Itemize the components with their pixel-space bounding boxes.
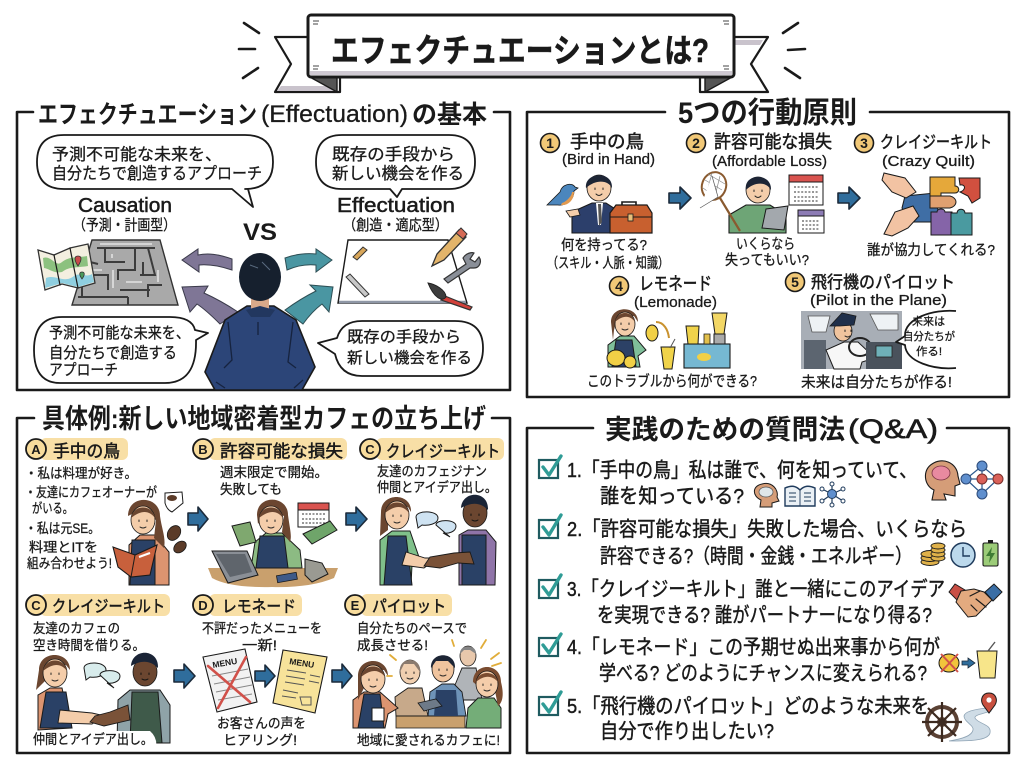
step A: Bird in Hand: A: [31, 442, 41, 457]
step D: Lemonade: 一新!: [242, 638, 277, 653]
principle 3: Crazy Quilt: 3: [860, 135, 868, 151]
step C: Crazy Quilt top: 友達のカフェジナン: [377, 464, 487, 479]
step A: Bird in Hand: がいる。: [32, 501, 73, 516]
icon: clock: [951, 543, 975, 567]
arrow: A to B: [188, 507, 208, 531]
step C: Crazy Quilt bottom: 空き時間を借りる。: [33, 638, 145, 653]
speech bubble: pilot: 作る!: [916, 345, 942, 358]
icon: check 1: [539, 456, 561, 478]
emphasis marks left: [239, 23, 259, 78]
step D: Lemonade: お客さんの声を: [217, 715, 306, 731]
question 5: 自分で作り出したい?: [600, 720, 774, 743]
principle 2: Affordable Loss: 2: [692, 135, 700, 151]
step A: Bird in Hand: 組み合わせよう!: [27, 556, 112, 571]
illustration: handshake at cafe: [28, 653, 170, 749]
step E: Pilot: 地域に愛されるカフェに!: [357, 733, 500, 748]
principle 5: Pilot in the Plane: 飛行機のパイロット: [811, 273, 955, 292]
icon: maze: [72, 240, 178, 305]
question 3: [539, 575, 1002, 627]
icon: check 4: [539, 634, 561, 656]
speech bubble: bottom left: [34, 317, 208, 383]
illustration: pilot in cockpit: [801, 311, 902, 369]
principle 5: Pilot in the Plane: (Pilot in the Plane): [810, 292, 947, 309]
illustration: woman budgeting at counter: [208, 500, 338, 587]
step A: Bird in Hand: 料理とITを: [29, 540, 98, 555]
icon: businessman with bird and toolbox: [547, 175, 652, 233]
principle 3: Crazy Quilt: クレイジーキルト: [880, 133, 992, 152]
heading: basics: エフェクチュエーション: [38, 101, 257, 129]
step B: Affordable Loss: [193, 438, 347, 587]
question 2: 許容できる?（時間・金銭・エネルギー）: [600, 545, 912, 568]
illustration: tool canvas: [338, 240, 467, 303]
illustration: old menu crossed out: [203, 649, 257, 712]
speech bubble: top left: 自分たちで創造するアプローチ: [52, 164, 262, 183]
step B: Affordable Loss: 週末限定で開始。: [220, 465, 328, 480]
speech bubble: bottom left: 自分たちで創造する: [49, 344, 177, 362]
heading: basics: (Effectuation): [261, 101, 408, 128]
step C: Crazy Quilt bottom: 仲間とアイデア出し。: [33, 731, 153, 747]
icon: person with net and calendars: [698, 169, 824, 233]
step B: Affordable Loss: B: [198, 442, 208, 457]
icon: open book: [785, 486, 815, 506]
label: Causation: Causation: [78, 195, 172, 217]
emphasis marks right: [783, 23, 805, 78]
step B: Affordable Loss: 許容可能な損失: [220, 442, 343, 461]
principle 1: Bird in Hand: (Bird in Hand): [562, 151, 655, 168]
speech bubble: bottom left: アプローチ: [49, 361, 118, 379]
question 5: [539, 692, 996, 743]
illustration: new menu: [273, 650, 327, 713]
principle 4: Lemonade: (Lemonade): [634, 294, 717, 311]
speech bubble: top left: 予測不可能な未来を、: [52, 145, 222, 164]
speech bubble: pilot: 自分たちが: [903, 329, 955, 343]
panel: concrete example: [17, 404, 510, 753]
arrow: to effectuation lower: [285, 285, 333, 324]
step D: Lemonade: [193, 594, 327, 748]
icon: paint brush: [428, 283, 472, 310]
principle 4: Lemonade: 4: [615, 278, 623, 294]
speech bubble: top left: [37, 135, 273, 207]
illustration: new menu: MENU: [289, 656, 315, 670]
principle 4: Lemonade: レモネード: [639, 274, 712, 294]
icon: small head: [754, 483, 779, 507]
icon: woman with lemons and juice stand: [607, 309, 730, 369]
icon: check 3: [539, 575, 561, 598]
icon: lemon crossed: [939, 654, 959, 672]
icon: network star: [820, 482, 845, 507]
step C: Crazy Quilt top: [360, 438, 504, 585]
icon: wrench: [444, 253, 480, 283]
heading: five principles: 5つの行動原則: [678, 97, 857, 130]
heading: concrete example: 具体例:新しい地域密着型カフェの立ち上げ: [42, 404, 486, 434]
step C: Crazy Quilt bottom: [26, 594, 170, 749]
icon: juice glass: [977, 642, 997, 678]
principle 5: Pilot in the Plane: 未来は自分たちが作る!: [801, 374, 952, 391]
principle 4: Lemonade: このトラブルから何ができる?: [587, 372, 757, 390]
arrow: D to E: [332, 664, 352, 688]
icon: network diamond: [961, 461, 1003, 499]
step B: Affordable Loss: 失敗しても: [220, 482, 282, 497]
step C: Crazy Quilt top: クレイジーキルト: [386, 442, 500, 461]
step A: Bird in Hand: ・私は料理が好き。: [25, 466, 137, 481]
title banner: エフェクチュエーションとは?: [331, 32, 709, 69]
icon: location pin: [982, 693, 996, 713]
label: Effectuation: [337, 195, 455, 234]
step E: Pilot: パイロット: [372, 598, 446, 616]
principle 2: Affordable Loss: 許容可能な損失: [714, 132, 832, 152]
label: Effectuation: Effectuation: [337, 195, 455, 217]
icon: coins: [921, 543, 945, 566]
speech bubble: bottom left: 予測不可能な未来を、: [49, 324, 190, 342]
arrow: to causation lower: [182, 286, 238, 324]
label: Causation: [73, 195, 176, 234]
icon: hands and puzzle pieces: [882, 173, 980, 236]
arrow: to effectuation upper: [285, 249, 332, 272]
question 2: [539, 515, 998, 568]
illustration: handshake with partner: [380, 495, 496, 585]
heading: Q and A: (Q&A): [848, 414, 938, 444]
arrow: old to new menu: [255, 665, 275, 687]
step A: Bird in Hand: ・私は元SE。: [25, 521, 100, 536]
question 4: [539, 634, 997, 685]
title banner: [275, 15, 768, 92]
question 1: 1.「手中の鳥」私は誰で、何を知っていて、: [567, 459, 917, 482]
speech bubble: top right: [316, 135, 475, 197]
illustration: old menu crossed out: MENU: [212, 656, 238, 670]
principle 2: Affordable Loss: [686, 132, 832, 269]
arrow: to causation upper: [182, 249, 232, 272]
principle 1: Bird in Hand: 何を持ってる?: [561, 237, 647, 254]
step E: Pilot: 自分たちのペースで: [357, 621, 467, 636]
principle 2: Affordable Loss: 失ってもいい?: [725, 252, 809, 269]
illustration: businessman from behind: [205, 253, 315, 390]
panel: five principles: [527, 97, 1009, 397]
icon: pencil: [432, 228, 467, 266]
step C: Crazy Quilt bottom: C: [31, 598, 41, 613]
speech bubble: pilot: [896, 311, 956, 368]
principle 5: Pilot in the Plane: 5: [791, 274, 799, 290]
icon: brain head large: [925, 461, 960, 500]
step D: Lemonade: D: [198, 598, 208, 613]
principle 1: Bird in Hand: [540, 132, 669, 272]
step E: Pilot: 成長させる!: [357, 638, 428, 653]
principle 3: Crazy Quilt: [854, 133, 995, 259]
icon: check 5: [539, 692, 561, 715]
speech bubble: top right: 新しい機会を作る: [332, 164, 464, 183]
question 4: 4.「レモネード」この予期せぬ出来事から何が: [567, 636, 940, 659]
step A: Bird in Hand: 手中の鳥: [53, 442, 120, 461]
icon: ship wheel: [922, 702, 962, 742]
icon: winding road: [949, 708, 991, 741]
panel: practical Q and A: [527, 414, 1009, 753]
principle 1: Bird in Hand: 手中の鳥: [570, 132, 644, 152]
label: Effectuation: （創造・適応型）: [343, 217, 448, 234]
heading: basics: の基本: [412, 101, 487, 129]
speech bubble: bottom right: [318, 321, 483, 376]
step C: Crazy Quilt bottom: クレイジーキルト: [52, 597, 165, 616]
step E: Pilot: E: [351, 598, 360, 613]
principle 2: Affordable Loss: いくらなら: [736, 236, 795, 253]
question 3: を実現できる? 誰がパートナーになり得る?: [597, 604, 932, 627]
label: VS: VS: [243, 219, 277, 246]
question 4: 学べる? どのようにチャンスに変えられる?: [599, 662, 927, 685]
speech bubble: bottom right: 新しい機会を作る: [347, 349, 472, 367]
principle 5: Pilot in the Plane: [786, 272, 956, 391]
heading: Q and A: 実践のための質問法: [605, 415, 845, 445]
principle 1: Bird in Hand: （スキル・人脈・知識）: [547, 255, 669, 272]
speech bubble: bottom right: 既存の手段から: [347, 328, 461, 346]
step D: Lemonade: ヒアリング!: [223, 733, 297, 748]
illustration: woman reading with coffee: [113, 492, 189, 585]
arrow: B to C: [346, 507, 367, 531]
principle 2: Affordable Loss: (Affordable Loss): [712, 153, 827, 170]
step E: Pilot: [345, 594, 503, 748]
question 1: 誰を知っている?: [600, 485, 744, 508]
principle 3: Crazy Quilt: 誰が協力してくれる?: [867, 242, 995, 259]
principle 1: Bird in Hand: 1: [546, 135, 554, 151]
icon: handshake: [949, 584, 1002, 617]
principle 3: Crazy Quilt: (Crazy Quilt): [882, 153, 975, 170]
step D: Lemonade: レモネード: [222, 597, 296, 616]
principle 4: Lemonade: [587, 274, 757, 390]
step A: Bird in Hand: ・友達にカフェオーナーが: [25, 485, 157, 500]
arrow: principle 1 to 2: [669, 187, 691, 209]
step C: Crazy Quilt bottom: 友達のカフェの: [33, 621, 120, 636]
icon: battery: [983, 540, 998, 566]
question 2: 2.「許容可能な損失」失敗した場合、いくらなら: [567, 518, 967, 541]
illustration: team and community at cafe: [353, 640, 503, 728]
speech bubble: top right: 既存の手段から: [332, 145, 455, 164]
step D: Lemonade: 不評だったメニューを: [202, 621, 322, 636]
step C: Crazy Quilt top: C: [365, 442, 375, 457]
question 3: 3.「クレイジーキルト」誰と一緒にこのアイデア: [567, 578, 945, 601]
icon: map: [38, 244, 95, 290]
heading: basics: [38, 101, 487, 129]
question 5: 5.「飛行機のパイロット」どのような未来を: [567, 695, 929, 718]
label: Causation: （予測・計画型）: [73, 217, 176, 234]
speech bubble: pilot: 未来は: [912, 315, 945, 328]
step C: Crazy Quilt top: 仲間とアイデア出し。: [377, 479, 497, 495]
panel: Effectuation basics: [17, 101, 510, 390]
question 1: [539, 456, 1003, 508]
icon: check 2: [539, 515, 561, 538]
arrow: C to D: [174, 664, 195, 688]
step A: Bird in Hand: [25, 438, 189, 585]
arrow: principle 2 to 3: [838, 187, 860, 209]
arrow: lemon to juice: [962, 658, 975, 668]
